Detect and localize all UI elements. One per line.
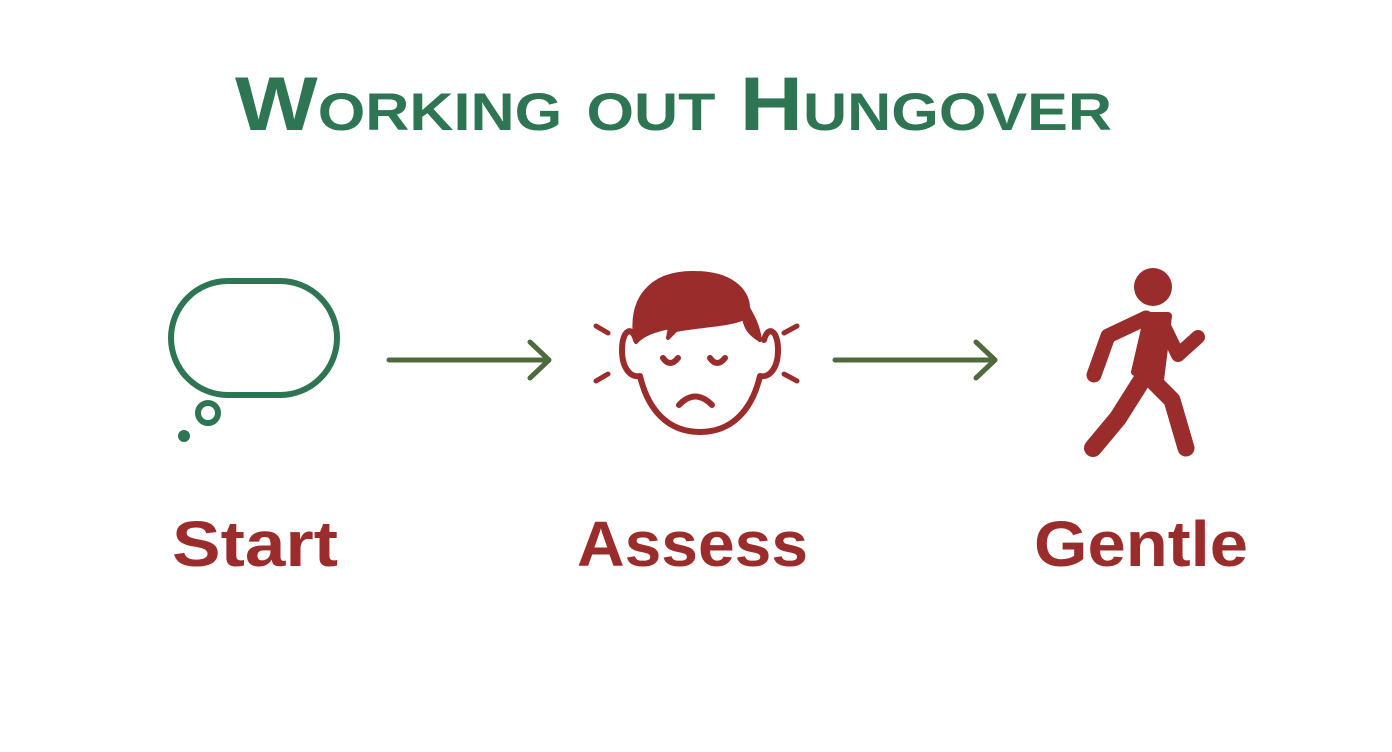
label: Gentle: Gentle [1034, 508, 1248, 580]
icon: walking person [1093, 268, 1198, 448]
arrow 1 [389, 342, 549, 378]
label: Start: Start [172, 508, 338, 580]
title: Working out Hungover [235, 62, 1112, 147]
arrow 2 [835, 342, 995, 378]
icon: thought bubble [171, 281, 337, 439]
icon: face with headache [596, 273, 797, 432]
label: Assess: Assess [577, 508, 808, 580]
